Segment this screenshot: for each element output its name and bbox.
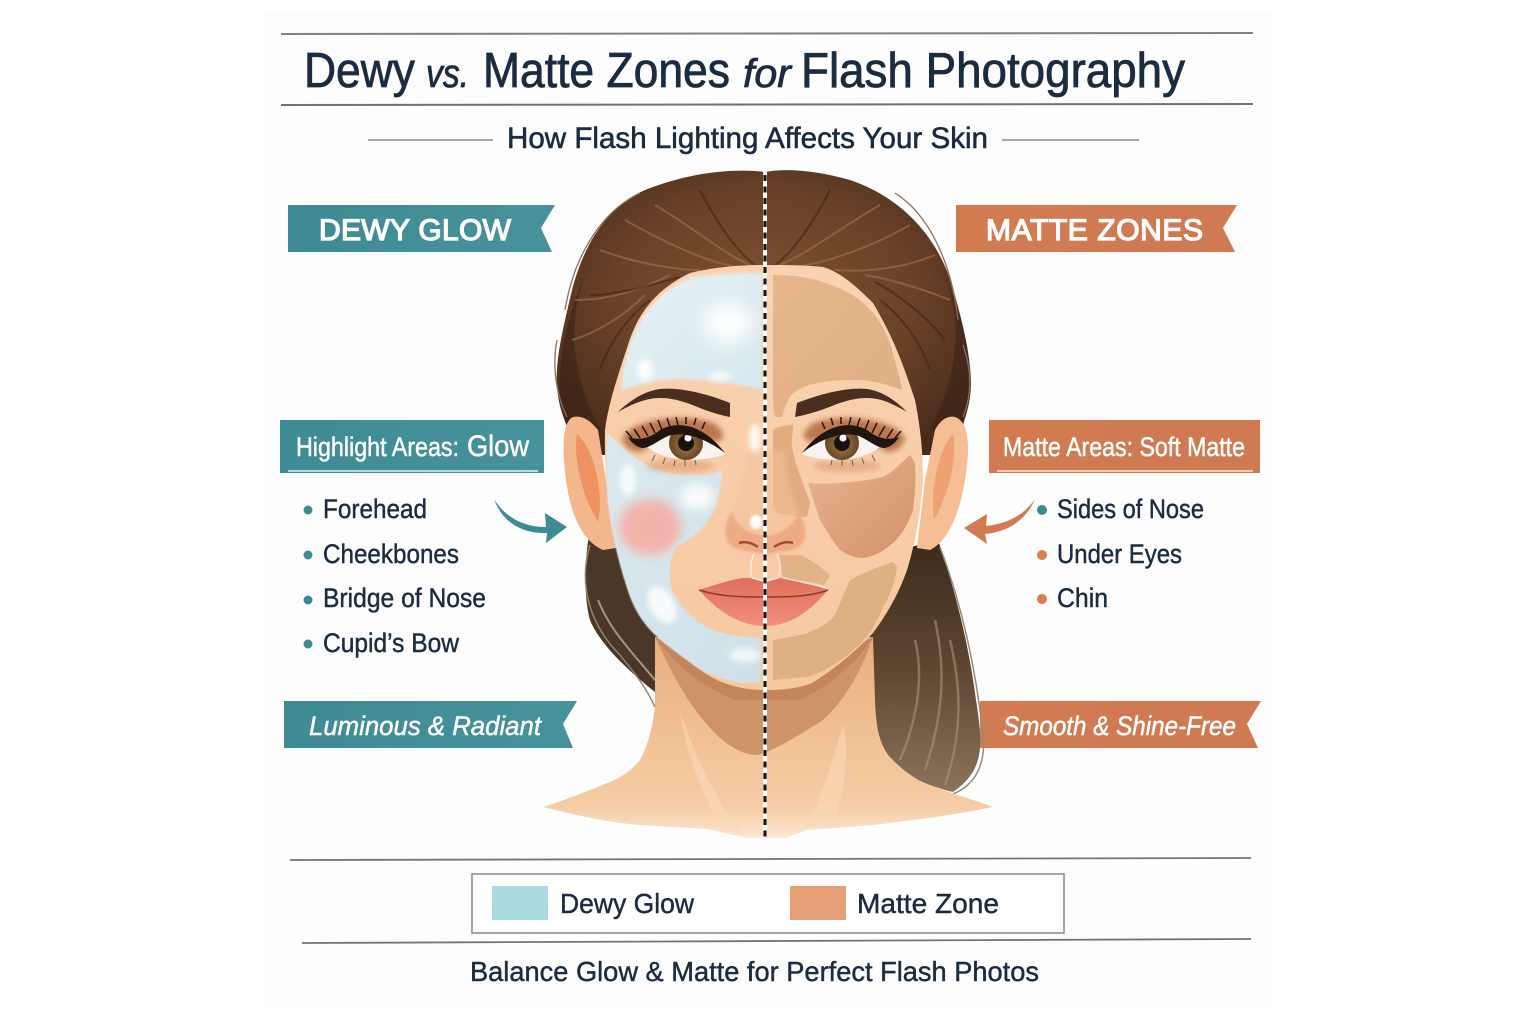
- zone: matte chin and jaw: [773, 562, 897, 680]
- title block: vs.: [426, 52, 469, 96]
- zone: matte nose side: [773, 425, 810, 517]
- neck: [543, 637, 993, 838]
- list: highlight areas: Cheekbones: [323, 539, 459, 569]
- legend rules: [290, 858, 1251, 943]
- face base: [605, 265, 923, 690]
- banner: dewy glow: DEWY GLOW: [319, 214, 512, 247]
- background panel: [263, 13, 1273, 1010]
- panel: highlight areas heading: Highlight Areas:: [296, 432, 459, 462]
- title block: Flash Photography: [801, 44, 1185, 98]
- ribbon: smooth and shine-free: Smooth & Shine-Free: [1003, 711, 1236, 741]
- ears: [564, 417, 968, 550]
- list: highlight areas: [304, 494, 486, 658]
- lips: [699, 554, 828, 626]
- panel: highlight areas heading: [280, 420, 544, 473]
- arrow: dewy to face: [494, 499, 567, 543]
- list: highlight areas: Forehead: [323, 494, 427, 524]
- panel: highlight areas heading: Glow: [467, 430, 529, 463]
- nose: [725, 424, 805, 554]
- ribbon: smooth and shine-free: [980, 701, 1261, 748]
- banner: matte zones: MATTE ZONES: [986, 214, 1203, 247]
- list: matte areas: Chin: [1057, 583, 1108, 613]
- arrow: matte to face: [964, 499, 1035, 544]
- ribbon: luminous and radiant: [284, 701, 577, 748]
- banner: matte zones: [956, 205, 1237, 252]
- illustration: split face: [543, 170, 993, 840]
- brows: [618, 389, 907, 417]
- zone: matte upper lip: [778, 555, 830, 585]
- eye: right: [802, 417, 901, 466]
- list: matte areas: Under Eyes: [1057, 539, 1182, 569]
- list: highlight areas: Bridge of Nose: [323, 583, 486, 613]
- eye shadow: [622, 418, 905, 472]
- panel: matte areas heading: Matte Areas: Soft Matte: [1003, 432, 1245, 462]
- center dashed divider: [763, 172, 767, 840]
- hair: crown: [555, 170, 971, 455]
- legend: Dewy Glow: [560, 888, 695, 919]
- title block: for: [743, 52, 793, 96]
- panel: matte areas heading: [989, 420, 1260, 473]
- subtitle: How Flash Lighting Affects Your Skin: [507, 122, 988, 155]
- title block: Dewy: [304, 44, 415, 98]
- hair: lower strands: [585, 530, 983, 794]
- list: matte areas: Sides of Nose: [1057, 494, 1204, 524]
- legend: [472, 874, 1064, 933]
- zone: matte cheek: [808, 455, 915, 558]
- zone: matte forehead: [773, 275, 902, 417]
- title block: [281, 33, 1253, 105]
- eye: left: [626, 417, 725, 466]
- legend: Matte Zone: [857, 888, 999, 919]
- list: highlight areas: Cupid’s Bow: [323, 628, 459, 658]
- banner: dewy glow: [288, 205, 555, 252]
- title block: Matte Zones: [483, 44, 730, 98]
- zone: dewy forehead: [621, 273, 762, 390]
- list: matte areas: [1037, 494, 1204, 613]
- ribbon: luminous and radiant: Luminous & Radiant: [309, 711, 542, 741]
- zone: dewy cheek and chin: [606, 433, 761, 683]
- footer tagline: Balance Glow & Matte for Perfect Flash Photos: [470, 956, 1039, 987]
